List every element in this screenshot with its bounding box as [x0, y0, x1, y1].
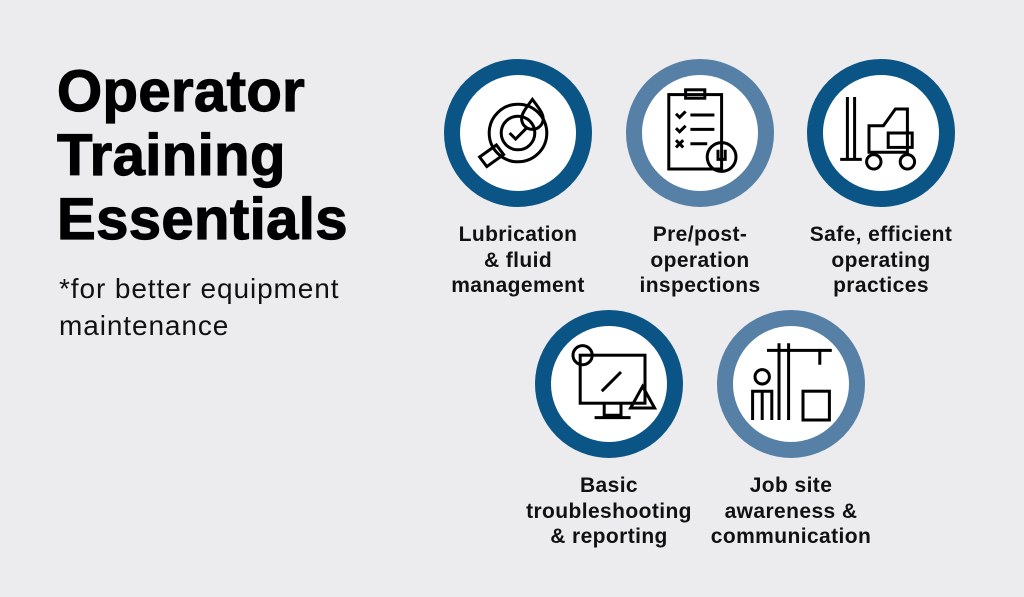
label: lubrication	[451, 223, 585, 297]
subtitle: maintenance	[59, 310, 229, 341]
label: job site: communication	[711, 525, 871, 548]
label: lubrication: & fluid	[484, 248, 552, 272]
label: operating practices	[810, 223, 952, 297]
icon circle: forklift	[807, 59, 955, 207]
label: lubrication: Lubrication	[459, 223, 577, 246]
label: job site	[711, 474, 871, 548]
title	[57, 59, 348, 252]
label: lubrication: management	[451, 274, 585, 297]
label: troubleshooting: troubleshooting	[526, 500, 692, 522]
label: job site: awareness &	[725, 500, 857, 522]
label: operating practices: Safe, efficient	[810, 223, 952, 246]
label: troubleshooting	[526, 474, 692, 548]
label: inspections: operation	[650, 248, 750, 272]
subtitle: *for better equipment	[59, 273, 339, 304]
icon circle: job site	[717, 310, 865, 458]
label: troubleshooting: & reporting	[550, 525, 668, 548]
label: operating practices: practices	[833, 274, 929, 297]
icon circle: lubrication	[444, 59, 592, 207]
title: Essentials	[57, 187, 348, 252]
label: troubleshooting: Basic	[580, 474, 638, 497]
label: job site: Job site	[750, 474, 832, 497]
title: Operator	[57, 59, 305, 124]
label: inspections	[639, 223, 761, 297]
title: Training	[57, 123, 286, 188]
label: operating practices: operating	[831, 248, 931, 272]
icon circle: troubleshooting	[535, 310, 683, 458]
label: inspections: inspections	[639, 274, 761, 297]
subtitle	[59, 273, 339, 341]
label: inspections: Pre/post-	[653, 223, 747, 246]
icon circle: inspections	[626, 59, 774, 207]
